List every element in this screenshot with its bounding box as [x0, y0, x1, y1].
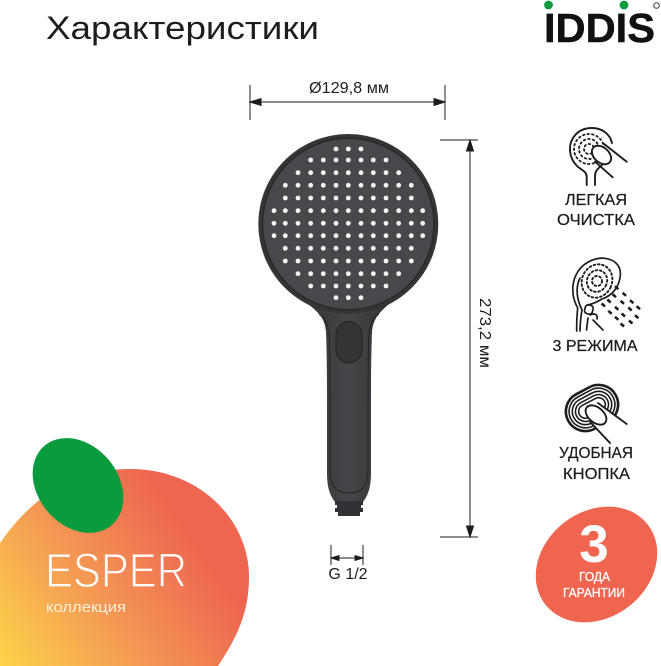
- dimension: height: 273,2 мм: [476, 298, 493, 368]
- label: three modes: 3 РЕЖИМА: [552, 338, 638, 355]
- dimension: diameter: [250, 80, 445, 120]
- handle inset outline: [319, 314, 379, 493]
- thread connector: [335, 501, 363, 516]
- icon: three modes: [573, 258, 640, 331]
- logo: IDDIS: IDDIS: [544, 5, 655, 51]
- label: easy cleaning: [557, 192, 635, 229]
- dimension: diameter: Ø129,8 мм: [309, 80, 389, 97]
- shower head: [258, 134, 438, 516]
- label: comfortable button: КНОПКА: [563, 466, 630, 483]
- label: easy cleaning: ОЧИСТКА: [557, 212, 635, 229]
- collection name: ESPER: [45, 545, 187, 598]
- label: easy cleaning: ЛЕГКАЯ: [565, 192, 627, 209]
- label: comfortable button: УДОБНАЯ: [559, 445, 633, 462]
- dimension: G 1/2: [328, 545, 368, 583]
- icon: easy cleaning: [570, 128, 627, 185]
- label: comfortable button: [559, 445, 633, 483]
- handle: [308, 304, 389, 502]
- green ellipse: [14, 420, 142, 551]
- dimension: G 1/2: G 1/2: [328, 566, 368, 583]
- toggle button: [336, 322, 362, 363]
- head disc: [258, 134, 438, 314]
- warranty number: 3: [579, 515, 609, 574]
- warranty badge: ГАРАНТИИ: [563, 585, 625, 600]
- dimension: height: [440, 140, 493, 537]
- spray nozzles: [272, 147, 425, 300]
- warranty badge: [513, 483, 661, 646]
- finger mask: [589, 402, 628, 444]
- title: Характеристики: [46, 10, 319, 46]
- warranty text: ГОДА: [579, 569, 610, 584]
- icon: comfortable button: [559, 378, 628, 444]
- collection blob: [0, 420, 249, 666]
- collection caption: коллекция: [46, 599, 126, 616]
